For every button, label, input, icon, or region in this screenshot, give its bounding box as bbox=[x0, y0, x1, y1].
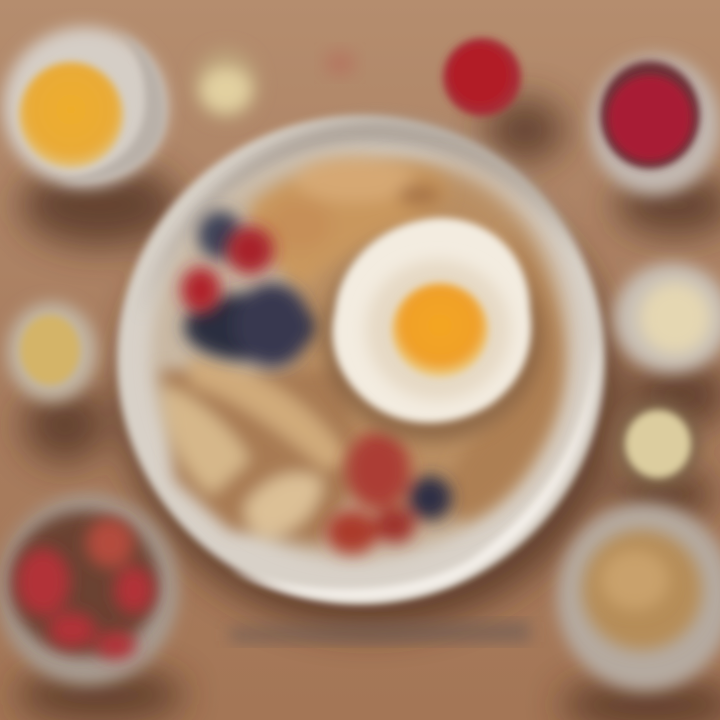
plate bbox=[117, 116, 605, 604]
waffle pieces top bbox=[249, 158, 448, 290]
plate inner well bbox=[151, 150, 561, 560]
faint red smudge top bbox=[324, 50, 356, 76]
toast crust right bbox=[450, 225, 560, 520]
bowl rim bbox=[3, 27, 167, 187]
egg shadow bbox=[322, 234, 542, 442]
jam bbox=[608, 75, 692, 161]
honey bbox=[19, 62, 123, 168]
bowl: granola bottom right bbox=[557, 503, 720, 691]
egg yolk bbox=[392, 283, 488, 377]
red berries upper bbox=[181, 226, 274, 313]
fork on table bbox=[230, 622, 530, 642]
bowl shaded side bbox=[60, 32, 165, 182]
granola bbox=[582, 530, 702, 650]
small cream cup top bbox=[193, 48, 259, 120]
cup: syrup left bbox=[7, 302, 97, 402]
strawberries bbox=[16, 518, 154, 659]
fried egg bbox=[322, 218, 542, 442]
bowl rim bbox=[0, 495, 178, 685]
egg white inner shade bbox=[366, 260, 510, 400]
toast base bbox=[285, 167, 565, 523]
bowl: jam top right bbox=[590, 55, 720, 195]
plate upper shaded rim bbox=[140, 118, 585, 320]
bowl rim bbox=[590, 55, 720, 195]
blueberries upper bbox=[184, 211, 316, 367]
bowl interior bbox=[10, 511, 158, 655]
cup: butter right bbox=[617, 401, 699, 487]
bowl: strawberries bottom left bbox=[0, 495, 178, 685]
plate rim highlight bbox=[230, 340, 596, 600]
cup: cream right bbox=[614, 263, 720, 373]
crackers lower left bbox=[160, 355, 360, 545]
bowl rim bbox=[557, 503, 720, 691]
bowl: honey top left bbox=[3, 27, 167, 187]
berries lower bbox=[326, 432, 452, 554]
bowl dark inner bbox=[600, 61, 700, 169]
egg white bbox=[332, 218, 531, 423]
plate outer rim bbox=[117, 116, 605, 604]
red jam ball top bbox=[443, 38, 521, 116]
